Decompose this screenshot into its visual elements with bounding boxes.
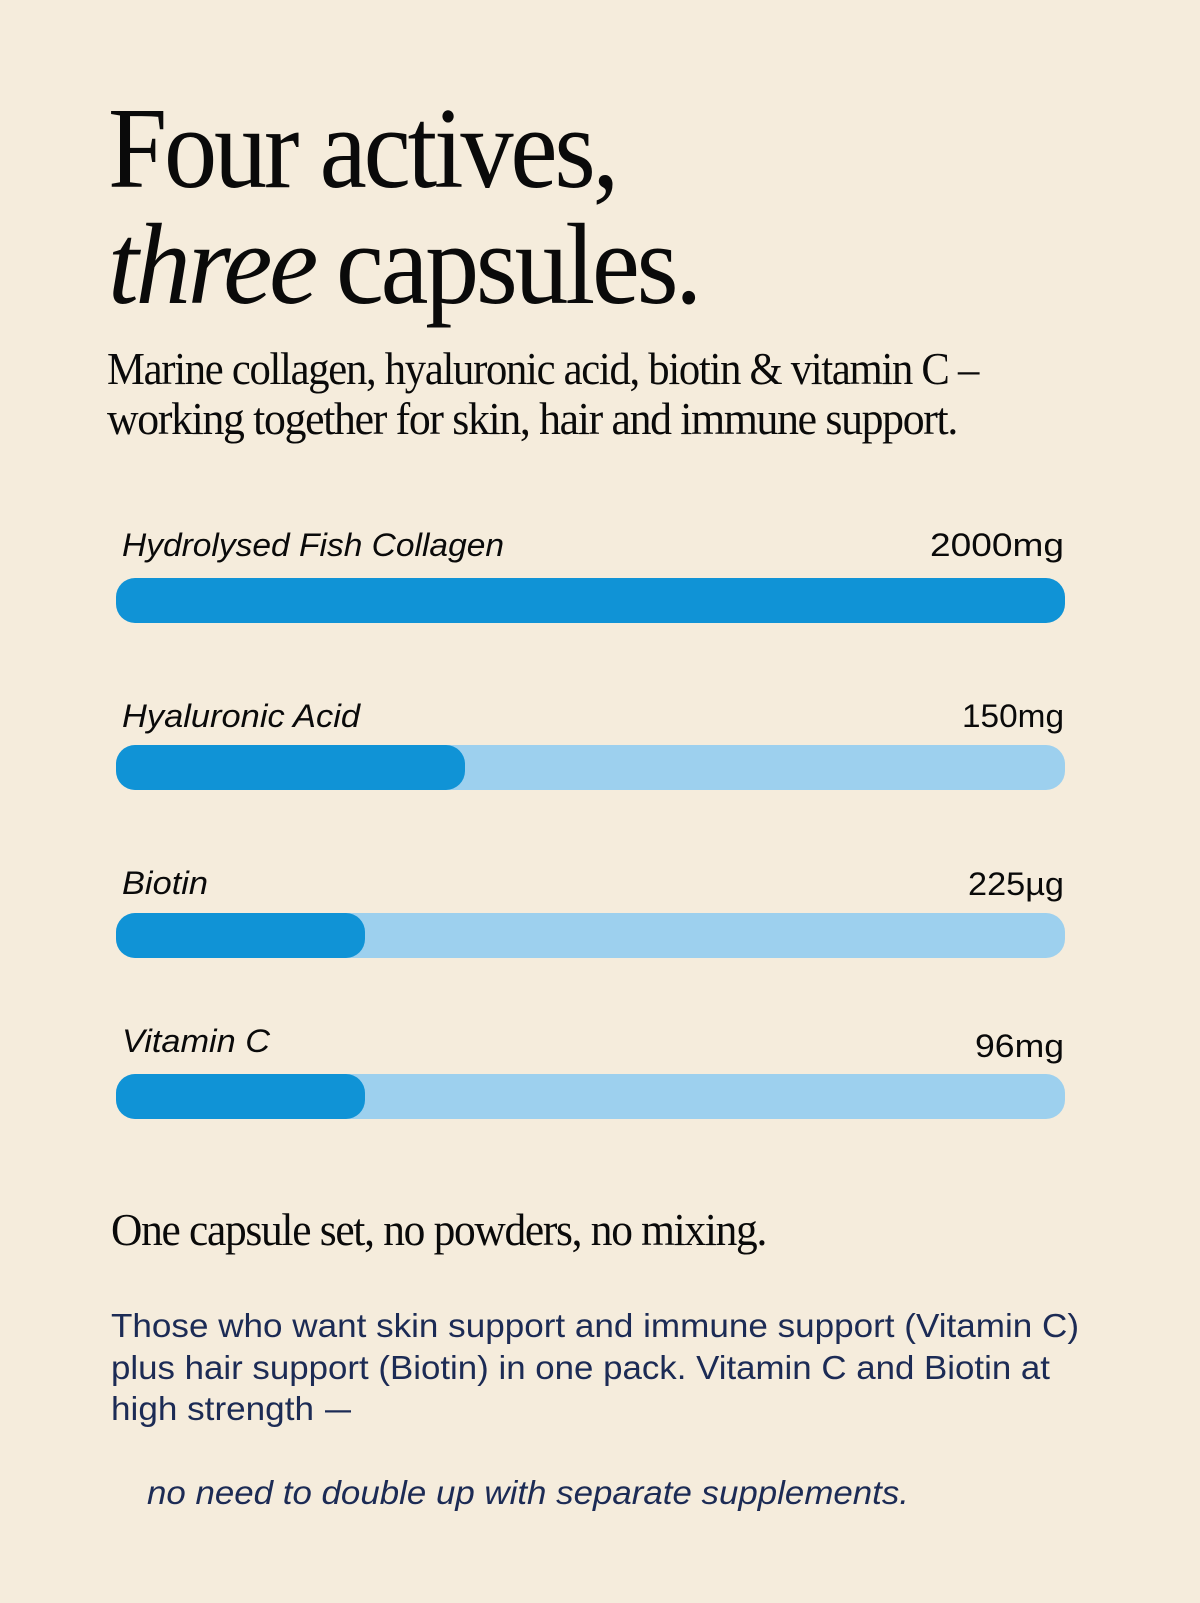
row: Hydrolysed Fish Collagen — [116, 527, 1065, 623]
subtitle — [107, 343, 980, 444]
body text: — — [325, 1390, 351, 1427]
row: Biotin — [116, 865, 1065, 958]
title: capsules. — [336, 201, 699, 329]
row: Hyaluronic Acid: 150mg — [962, 698, 1064, 734]
row: Hydrolysed Fish Collagen: Hydrolysed Fish Collagen — [122, 527, 504, 563]
row: Vitamin C: Vitamin C — [122, 1023, 271, 1059]
row: Hydrolysed Fish Collagen: 2000mg — [930, 527, 1064, 563]
subtitle: Marine collagen, hyaluronic acid, biotin & vitamin C – — [107, 343, 980, 394]
title — [108, 85, 699, 329]
body text: plus hair support (Biotin) in one pack. Vitamin C and Biotin at — [111, 1349, 1050, 1386]
tagline: One capsule set, no powders, no mixing. — [111, 1204, 766, 1255]
closing note: no need to double up with separate supplements. — [147, 1474, 909, 1511]
body text: high strength — [111, 1390, 314, 1427]
row: Vitamin C: 96mg — [975, 1028, 1064, 1064]
body text — [111, 1307, 1079, 1427]
bar chart: ingredient doses — [116, 527, 1065, 1119]
row: Vitamin C — [116, 1023, 1065, 1119]
body text: Those who want skin support and immune support (Vitamin C) — [111, 1307, 1079, 1344]
row: Hyaluronic Acid: Hyaluronic Acid — [122, 698, 361, 734]
row: Biotin: Biotin — [122, 865, 208, 901]
subtitle: working together for skin, hair and immune support. — [107, 393, 957, 444]
row: Biotin: 225µg — [968, 866, 1064, 902]
title: Four actives, — [108, 85, 616, 213]
row: Hyaluronic Acid — [116, 698, 1065, 790]
title: three — [108, 201, 316, 329]
